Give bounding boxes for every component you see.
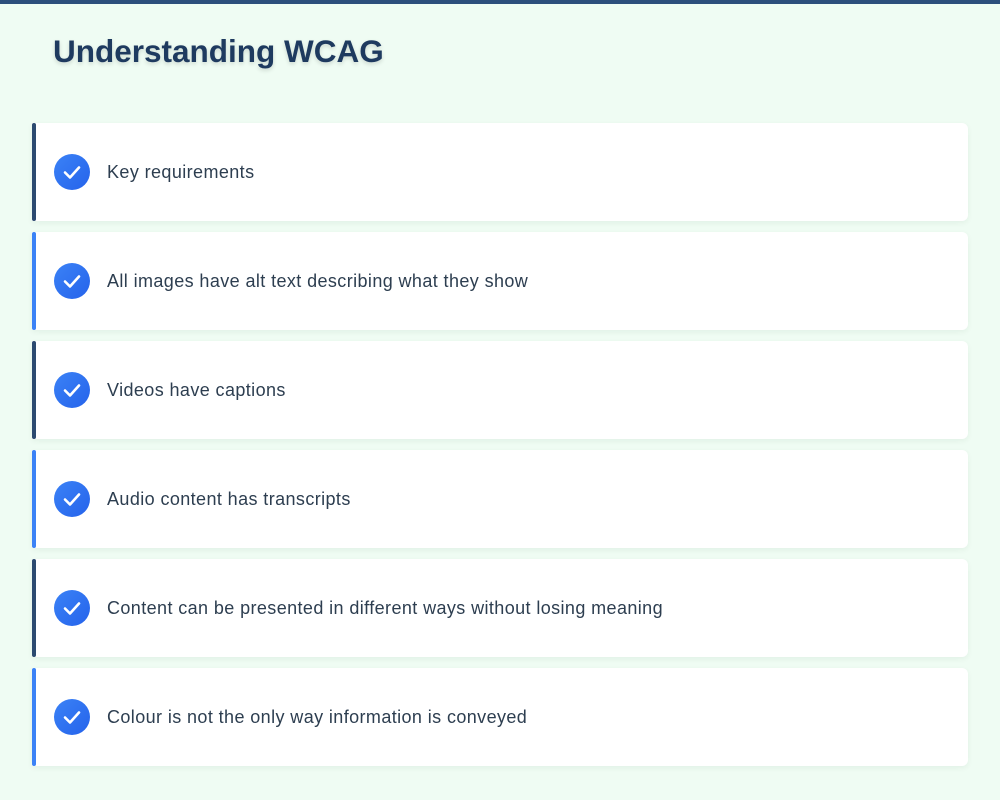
icon: check (54, 154, 90, 190)
card: captions (32, 341, 968, 439)
text: Colour is not the only way information is conveyed (107, 707, 527, 727)
text: Videos have captions (107, 380, 286, 400)
title: Understanding WCAG (53, 33, 384, 69)
card: colour (32, 668, 968, 766)
text: Content can be presented in different ways without losing meaning (107, 598, 663, 618)
icon: check (54, 699, 90, 735)
icon: check (54, 590, 90, 626)
text: Key requirements (107, 162, 254, 182)
card: transcripts (32, 450, 968, 548)
icon: check (54, 372, 90, 408)
card: key requirements (32, 123, 968, 221)
icon: check (54, 263, 90, 299)
card: presentation (32, 559, 968, 657)
icon: check (54, 481, 90, 517)
card: alt text (32, 232, 968, 330)
text: Audio content has transcripts (107, 489, 351, 509)
text: All images have alt text describing what they show (107, 271, 528, 291)
